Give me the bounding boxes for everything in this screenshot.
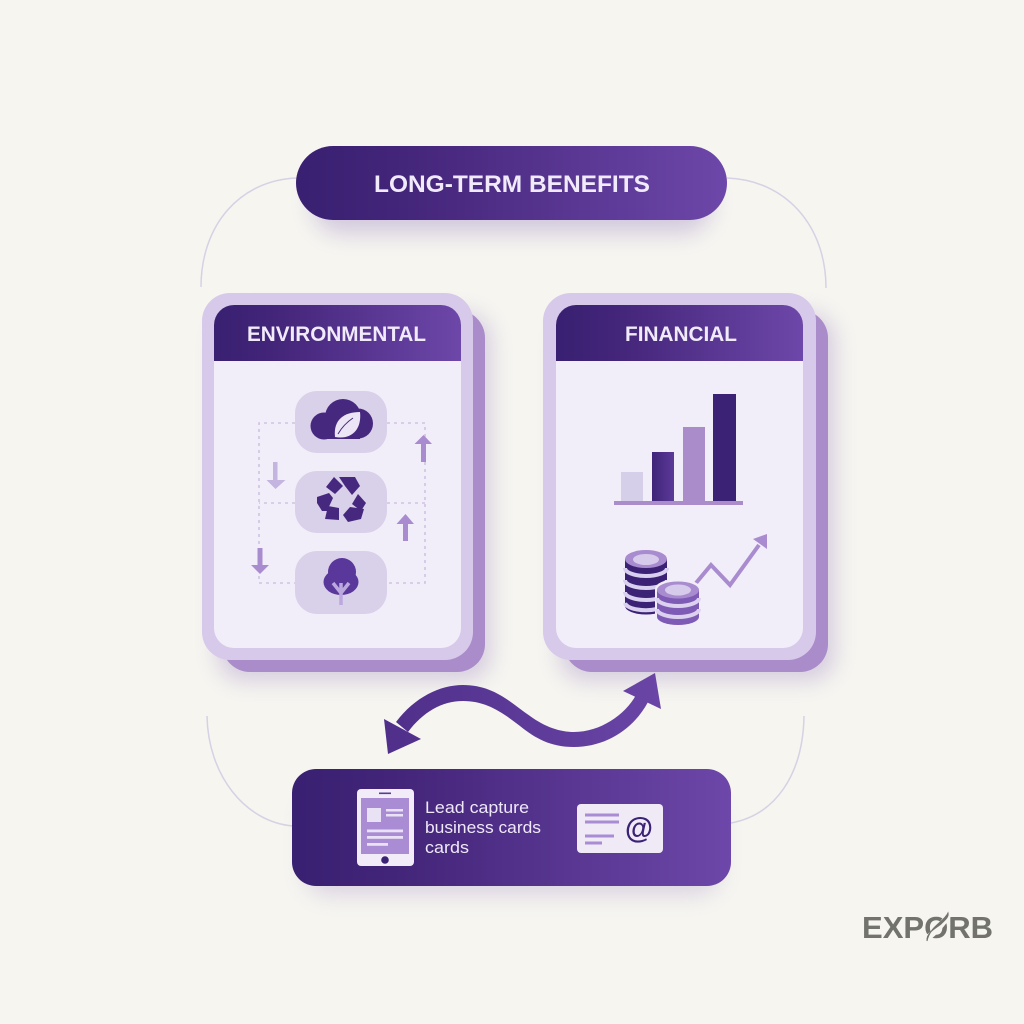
panel: environmental	[202, 293, 492, 682]
title text: LONG-TERM BENEFITS	[374, 171, 650, 198]
arrow: two-way wave	[384, 673, 661, 754]
dotted cycle lines	[259, 423, 425, 583]
arrow: down left	[251, 548, 269, 574]
lead capture text: business cards	[425, 819, 541, 837]
tile: tree	[295, 551, 387, 614]
lead capture text: Lead capture	[425, 799, 529, 817]
icon: coin stack dark	[625, 550, 667, 614]
financial header	[556, 305, 803, 361]
icon: email card	[577, 804, 663, 853]
connector arcs	[201, 178, 826, 826]
tile: cloud leaf	[295, 391, 387, 453]
icon: coin stack light	[655, 579, 701, 627]
arrow: light down	[266, 462, 286, 489]
icon: recycle	[317, 477, 366, 522]
icon: growth line	[696, 534, 767, 585]
icon: tree	[324, 558, 358, 605]
arrow: up right outer	[414, 435, 432, 462]
icon: cloud with leaf	[310, 399, 373, 440]
financial header: FINANCIAL	[625, 323, 737, 346]
arrow: up right inner	[396, 514, 414, 541]
bottom panel: lead capture	[292, 769, 731, 895]
tile: recycle	[295, 471, 387, 533]
lead capture text	[425, 799, 541, 857]
lead capture text: cards	[425, 839, 469, 857]
icon: tablet	[357, 789, 414, 866]
environmental header	[214, 305, 461, 361]
icon: email card: @	[625, 812, 653, 845]
title pill	[296, 146, 727, 234]
environmental header: ENVIRONMENTAL	[247, 323, 426, 346]
bar chart	[614, 394, 743, 505]
logo: EXPORB: EXPORB	[862, 911, 993, 945]
panel: financial	[543, 293, 836, 682]
